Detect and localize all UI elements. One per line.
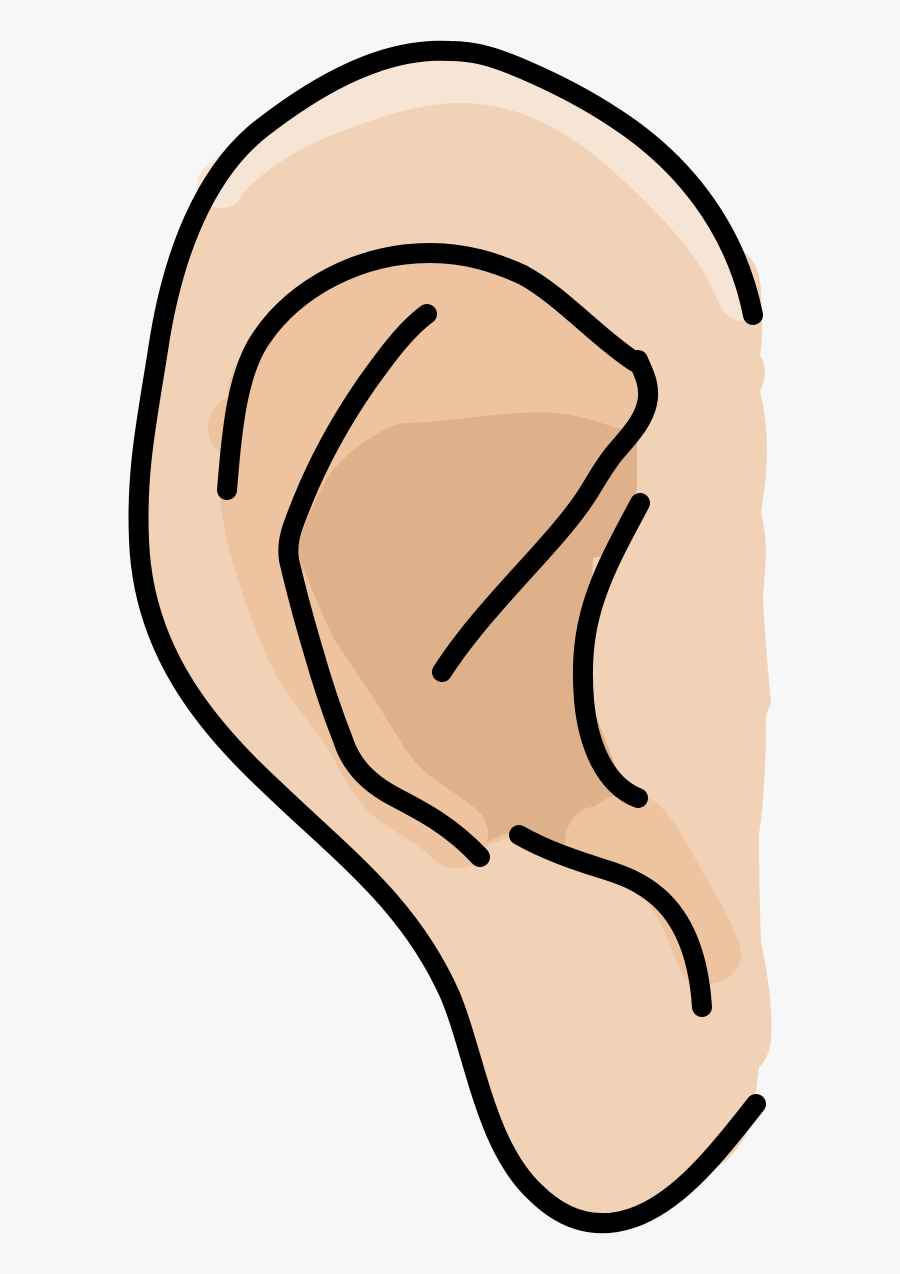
antitragus line	[583, 503, 640, 798]
lobe fold line	[519, 835, 702, 1007]
concha dark tone	[298, 412, 637, 845]
antihelix upper line	[227, 253, 635, 490]
inner fold line	[288, 314, 480, 857]
ear base skin fill	[138, 51, 771, 1223]
inner ear mid tone	[208, 253, 741, 985]
rim highlight	[197, 52, 752, 321]
outer helix line	[138, 51, 756, 1223]
tragus and inner curve line	[442, 360, 648, 672]
